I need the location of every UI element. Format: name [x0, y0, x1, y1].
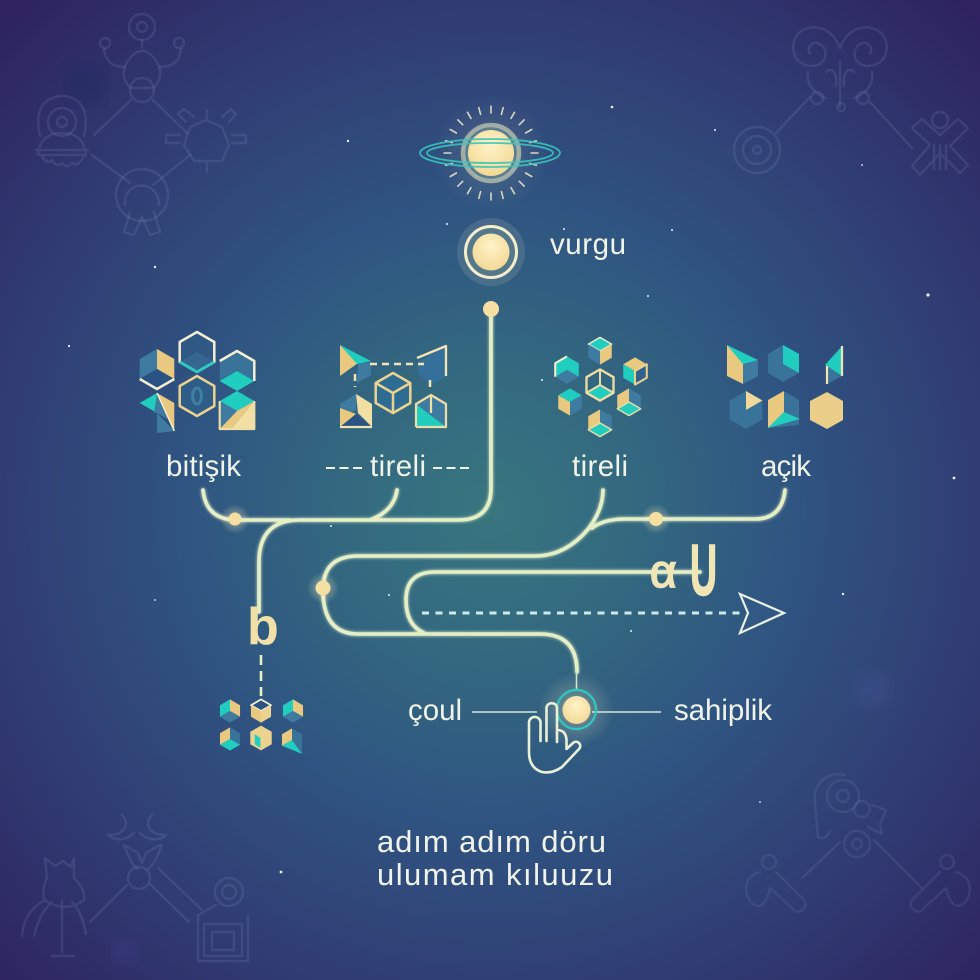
center cube outline: [376, 373, 410, 413]
cube top: [588, 337, 612, 365]
stars: [68, 106, 955, 873]
cube 5: [250, 726, 272, 750]
shape upper right: [825, 346, 842, 384]
icon: vurgu circle: [457, 218, 525, 286]
icon group: açik hexagons: [727, 345, 843, 429]
icon group: bitişik hexagons: [140, 332, 254, 433]
dashed connectors: [355, 364, 430, 387]
label: sahiplik: sahiplik: [674, 694, 772, 727]
cube center outline: [587, 369, 613, 401]
shape lower right gold hex: [810, 392, 843, 429]
cube 6: [282, 728, 302, 754]
letter: a with loop: U: [690, 531, 717, 611]
decoration: folk figures top right: [734, 27, 968, 175]
cube bottom: [588, 409, 612, 437]
cube 3: [283, 699, 303, 723]
shape lower left: [730, 391, 762, 429]
decoration: folk figures bottom right: [746, 774, 970, 912]
node: top of vertical line: [483, 301, 499, 317]
cube 4: [220, 727, 240, 751]
title: [377, 824, 613, 892]
cube lower right: [617, 388, 641, 416]
labels: word categories: bitişik: [166, 450, 241, 483]
decoration: folk figures bottom left: [22, 815, 248, 961]
labels: word categories: [166, 450, 811, 483]
cube 2: [251, 699, 271, 723]
icon: hand pointer: [529, 703, 580, 772]
label: vurgu: vurgu: [550, 228, 626, 261]
cube left: [555, 356, 579, 384]
labels: word categories: açik: [761, 450, 811, 483]
letter: a with loop: [650, 531, 717, 611]
hex lower right: [220, 391, 254, 429]
hex top outline: [180, 332, 214, 372]
shape upper center: [768, 345, 799, 382]
shape upper left: [727, 345, 758, 384]
letter: a with loop: α: [650, 545, 677, 597]
node: açik line: [641, 504, 671, 534]
labels: word categories: tireli: [572, 450, 628, 483]
hex right: [220, 351, 254, 391]
connector lines: [203, 309, 785, 672]
cube lower left: [558, 388, 582, 416]
shape lower center: [768, 391, 800, 428]
node: left curve: [307, 572, 339, 604]
shape top left: [340, 345, 371, 383]
letter: b with dashed line: [247, 598, 279, 696]
thin connector to thumb node: [576, 672, 578, 690]
decoration: folk figures top left: [36, 14, 246, 235]
hex center gold outline with zero: [180, 376, 214, 416]
shape top right: [417, 346, 446, 384]
node: bitişik line: [220, 504, 250, 534]
shape bottom left: [340, 394, 372, 427]
icon group: small cubes: [220, 699, 303, 754]
node: tapped circle with side lines: [472, 672, 661, 748]
icon group: tireli cube ring: [555, 337, 647, 437]
cube right: [623, 357, 647, 385]
letter: b with dashed line: b: [247, 598, 279, 656]
sun rays: [444, 106, 538, 200]
icon: planet with rings: [420, 95, 560, 211]
labels: word categories: tireli: [370, 450, 426, 483]
label: çoul: çoul: [408, 694, 462, 727]
hex left: [140, 349, 174, 389]
shape bottom right: [416, 395, 446, 427]
saturn rings: [420, 139, 560, 167]
title: adım adım döru: [377, 824, 606, 859]
title: ulumam kıluuzu: [377, 857, 613, 892]
cube 1: [220, 699, 240, 723]
dashed arrow: [422, 594, 784, 633]
hex lower left: [140, 393, 174, 433]
icon group: tireli hexagons with dashes: [340, 345, 446, 427]
